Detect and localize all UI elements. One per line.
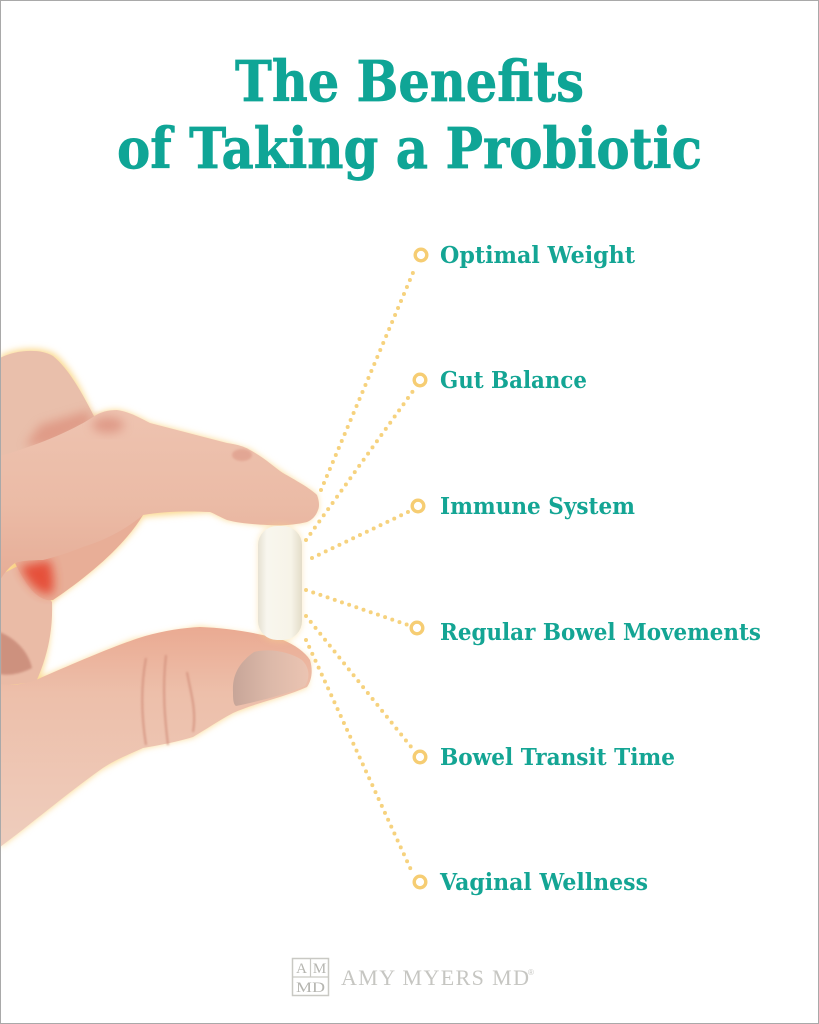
benefit: Regular Bowel Movements: Regular Bowel Movements: [440, 619, 761, 646]
middle finger: [0, 351, 95, 458]
logo wordmark: AMY MYERS MD: [341, 965, 529, 990]
red shadow under middle finger: [25, 410, 90, 446]
thumb: [0, 627, 312, 847]
index knuckle: [92, 417, 124, 433]
benefit: Bowel Transit Time: Bowel Transit Time: [440, 744, 675, 771]
capsule: [258, 525, 302, 641]
title: The Benefits: [235, 49, 584, 115]
lower finger crease: [0, 632, 32, 675]
hand glow outline: [0, 349, 318, 847]
registered mark: ®: [528, 968, 534, 977]
thumb nail: [233, 650, 308, 706]
logo monogram: MD: [296, 980, 325, 996]
red shadow under index finger: [20, 560, 54, 594]
second finger under index: [15, 515, 143, 600]
logo monogram: A: [296, 961, 307, 977]
lower finger: [0, 565, 52, 686]
logo monogram: [292, 958, 328, 996]
index tip knuckle: [232, 449, 252, 461]
benefit: Vaginal Wellness: Vaginal Wellness: [439, 869, 648, 896]
benefit: Gut Balance: Gut Balance: [440, 367, 587, 394]
title: [117, 49, 702, 182]
hand holding capsule: [0, 349, 319, 847]
logo: Amy Myers MD: [292, 958, 534, 996]
dotted connector lines: [306, 268, 415, 872]
title: of Taking a Probiotic: [117, 116, 702, 182]
benefit: Immune System: Immune System: [440, 493, 635, 520]
logo monogram: M: [313, 961, 326, 977]
benefit: Optimal Weight: Optimal Weight: [440, 242, 635, 269]
thumb creases: [142, 655, 194, 745]
index finger: [0, 410, 319, 580]
